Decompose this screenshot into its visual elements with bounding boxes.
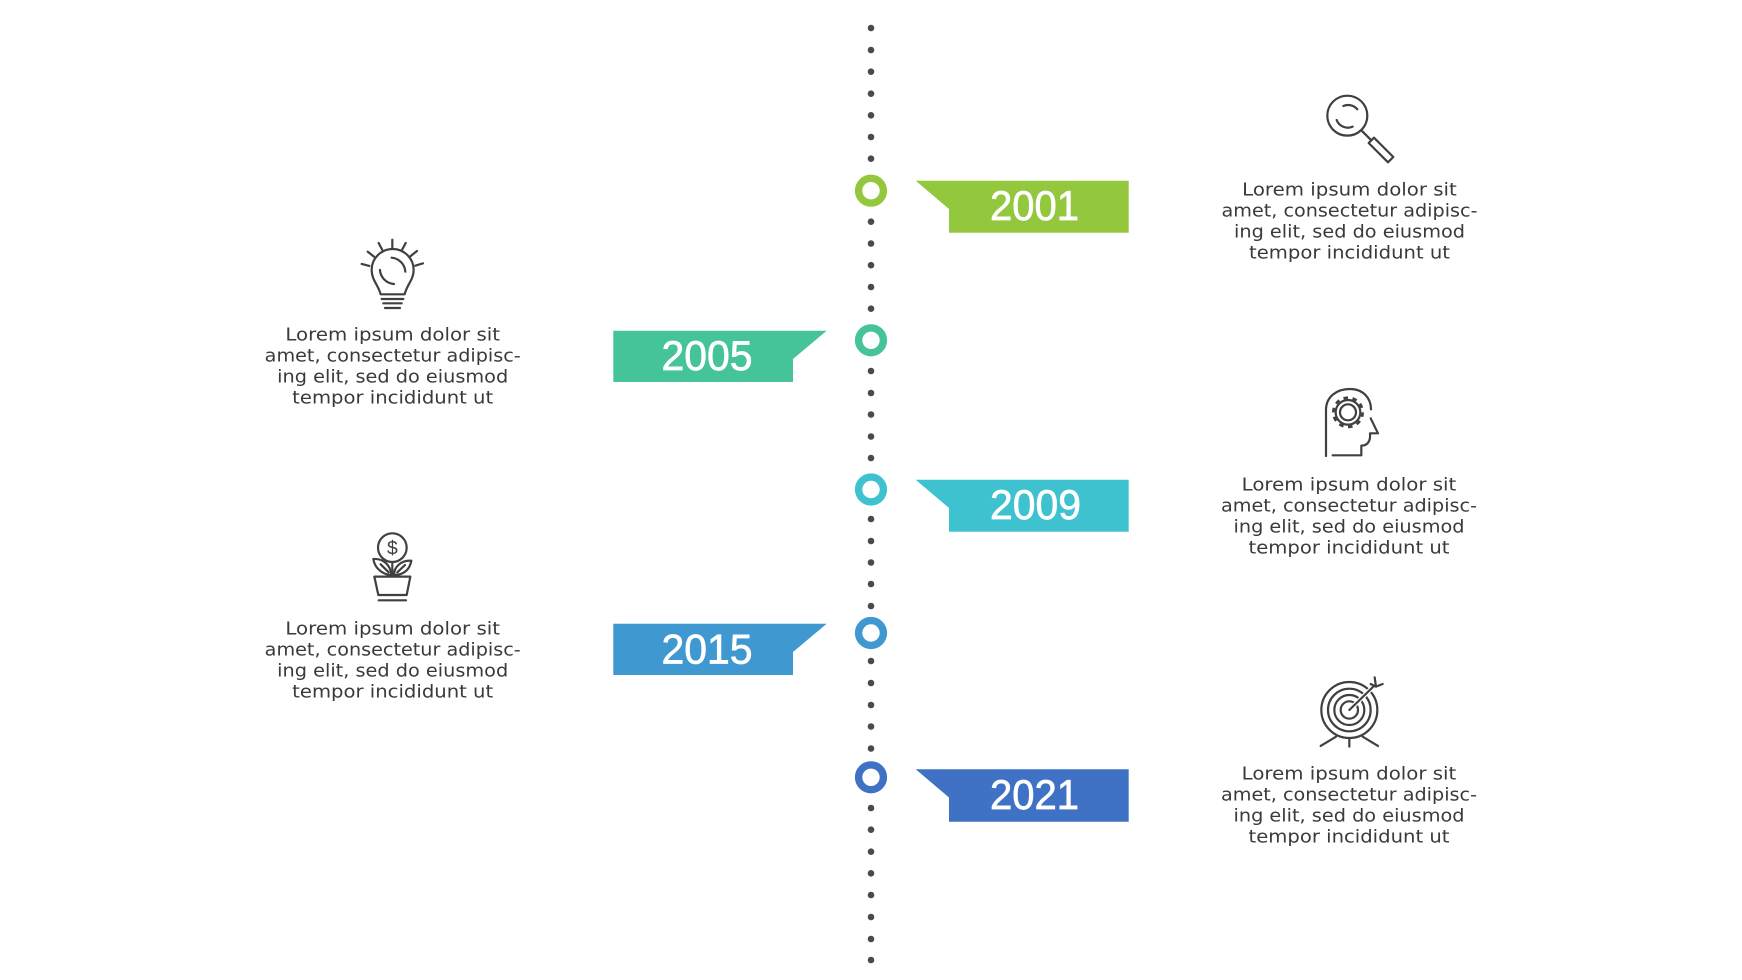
- icon: money plant: [373, 533, 411, 600]
- marker 2001: [859, 178, 883, 203]
- text block 2015: ing elit, sed do eiusmod: [277, 660, 508, 682]
- icon: head with gear: [1326, 389, 1378, 456]
- text block 2005: Lorem ipsum dolor sit: [285, 324, 500, 346]
- flag 2015: 2015: [662, 626, 752, 672]
- text block 2005: amet, consectetur adipisc-: [265, 346, 521, 366]
- flag 2009: 2009: [990, 481, 1081, 528]
- icon: target with arrow: [1321, 677, 1383, 747]
- flag 2015: [613, 624, 827, 675]
- icon: money plant: $: [387, 538, 398, 559]
- flag 2001: 2001: [990, 182, 1079, 229]
- text block 2001: tempor incididunt ut: [1249, 242, 1450, 264]
- text block 2001: Lorem ipsum dolor sit: [1242, 180, 1457, 200]
- marker 2021: [859, 765, 883, 790]
- text block 2009: tempor incididunt ut: [1248, 538, 1450, 558]
- text block 2015: tempor incididunt ut: [292, 682, 493, 702]
- text block 2009: ing elit, sed do eiusmod: [1234, 516, 1464, 538]
- flag 2001: [916, 181, 1129, 233]
- flag 2005: 2005: [662, 332, 752, 379]
- text block 2021: ing elit, sed do eiusmod: [1234, 806, 1464, 826]
- icon: magnifying glass: [1327, 96, 1393, 162]
- text block 2009: amet, consectetur adipisc-: [1221, 496, 1477, 516]
- icon: light bulb: [362, 240, 423, 308]
- marker 2015: [859, 621, 883, 645]
- marker 2005: [859, 328, 883, 353]
- text block 2009: Lorem ipsum dolor sit: [1242, 474, 1456, 496]
- text block 2001: ing elit, sed do eiusmod: [1234, 222, 1465, 242]
- marker 2009: [859, 477, 883, 502]
- flag 2021: 2021: [990, 771, 1079, 818]
- text block 2001: amet, consectetur adipisc-: [1222, 200, 1478, 222]
- text block 2021: [1221, 764, 1477, 848]
- flag 2021: [916, 769, 1129, 822]
- text block 2015: [265, 618, 521, 702]
- text block 2021: amet, consectetur adipisc-: [1221, 784, 1477, 806]
- text block 2005: ing elit, sed do eiusmod: [277, 366, 508, 388]
- flag 2009: [916, 480, 1129, 532]
- flag 2005: [613, 331, 827, 382]
- text block 2009: [1221, 474, 1477, 558]
- text block 2021: tempor incididunt ut: [1248, 826, 1450, 848]
- text block 2015: amet, consectetur adipisc-: [265, 640, 521, 660]
- text block 2001: [1222, 180, 1478, 264]
- timeline dotted line: [868, 25, 874, 963]
- text block 2005: tempor incididunt ut: [292, 388, 493, 408]
- text block 2015: Lorem ipsum dolor sit: [285, 618, 500, 640]
- text block 2021: Lorem ipsum dolor sit: [1242, 764, 1456, 784]
- text block 2005: [265, 324, 521, 408]
